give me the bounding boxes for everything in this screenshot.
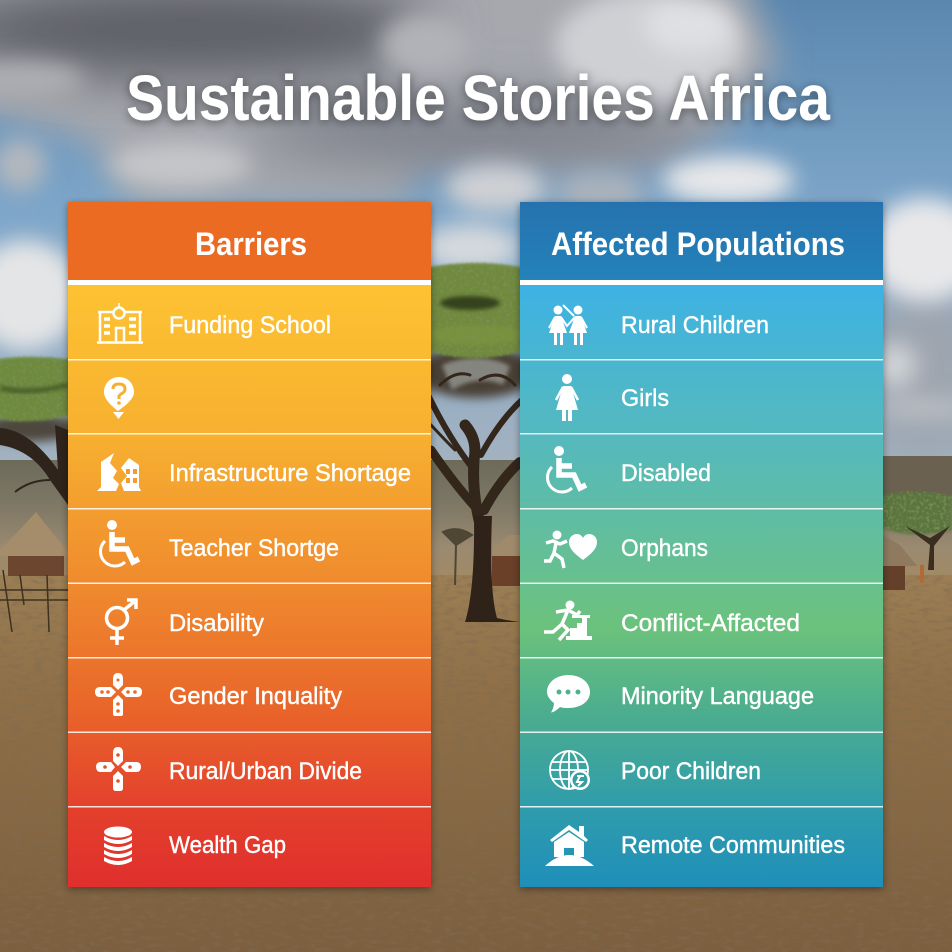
populations header bbox=[520, 202, 883, 280]
row: poor children: Poor Children bbox=[621, 758, 761, 785]
icon: girl bbox=[556, 374, 578, 421]
row: orphans: Orphans bbox=[621, 535, 708, 562]
row: girls bbox=[556, 374, 669, 421]
row: rural/urban divide: Rural/Urban Divide bbox=[169, 758, 362, 785]
barriers header: Barriers bbox=[195, 226, 307, 262]
right tree and hut bbox=[883, 456, 952, 590]
row: infrastructure shortage bbox=[97, 453, 411, 491]
row: remote communities: Remote Communities bbox=[621, 832, 845, 859]
row: funding school: Funding School bbox=[169, 312, 331, 339]
row: poor children bbox=[550, 751, 761, 790]
row: conflict-affacted bbox=[544, 600, 800, 640]
row: infrastructure shortage: Infrastructure Shortage bbox=[169, 460, 411, 487]
row: disability: Disability bbox=[169, 610, 264, 637]
icon: person fleeing building bbox=[544, 600, 592, 640]
icon: coin stack bbox=[104, 826, 132, 865]
row: disability bbox=[106, 600, 264, 645]
barriers header bbox=[68, 202, 431, 280]
row: minority language: Minority Language bbox=[621, 683, 814, 710]
icon: running child and heart bbox=[544, 530, 597, 568]
row: gender inquality bbox=[95, 673, 342, 716]
icon: speech bubble bbox=[547, 675, 590, 712]
row: disabled bbox=[547, 446, 711, 492]
clouds bbox=[0, 0, 952, 460]
panel: affected populations bbox=[520, 202, 883, 887]
icon: two children bbox=[549, 305, 587, 345]
row: rural children bbox=[549, 305, 769, 345]
small background tree bbox=[443, 529, 472, 585]
icon: school building bbox=[97, 303, 143, 342]
row: girls: Girls bbox=[621, 385, 669, 412]
row: rural/urban divide bbox=[96, 747, 362, 791]
icon: gender symbol bbox=[106, 600, 136, 645]
title: Sustainable Stories Africa bbox=[126, 62, 830, 134]
row: teacher shortge bbox=[100, 520, 339, 566]
row: disabled: Disabled bbox=[621, 460, 711, 487]
row: funding school bbox=[97, 303, 331, 342]
row: wealth gap: Wealth Gap bbox=[169, 832, 286, 859]
populations header: Affected Populations bbox=[551, 226, 845, 262]
row: minority language bbox=[547, 675, 814, 712]
row: wealth gap bbox=[104, 826, 286, 865]
row: rural children: Rural Children bbox=[621, 312, 769, 339]
central acacia tree bbox=[416, 263, 536, 622]
row: teacher shortge: Teacher Shortge bbox=[169, 535, 339, 562]
icon: four-way cross bbox=[96, 747, 141, 791]
row: conflict-affacted: Conflict-Affacted bbox=[621, 610, 800, 637]
icon: wheelchair bbox=[547, 446, 586, 492]
row: orphans bbox=[544, 530, 708, 568]
left acacia tree bbox=[0, 357, 78, 505]
icon: wheelchair bbox=[100, 520, 139, 566]
panel: barriers bbox=[68, 202, 431, 887]
row: remote communities bbox=[545, 825, 845, 866]
small middle hut bbox=[491, 535, 520, 586]
icon: four-way cross bbox=[95, 673, 142, 716]
icon: question pin bbox=[104, 377, 134, 419]
icon: globe with coin bbox=[550, 751, 590, 790]
icon: house on hill bbox=[545, 825, 594, 866]
left thatched hut bbox=[0, 512, 68, 632]
icon: broken building bbox=[97, 453, 141, 491]
row: gender inquality: Gender Inquality bbox=[169, 683, 342, 710]
